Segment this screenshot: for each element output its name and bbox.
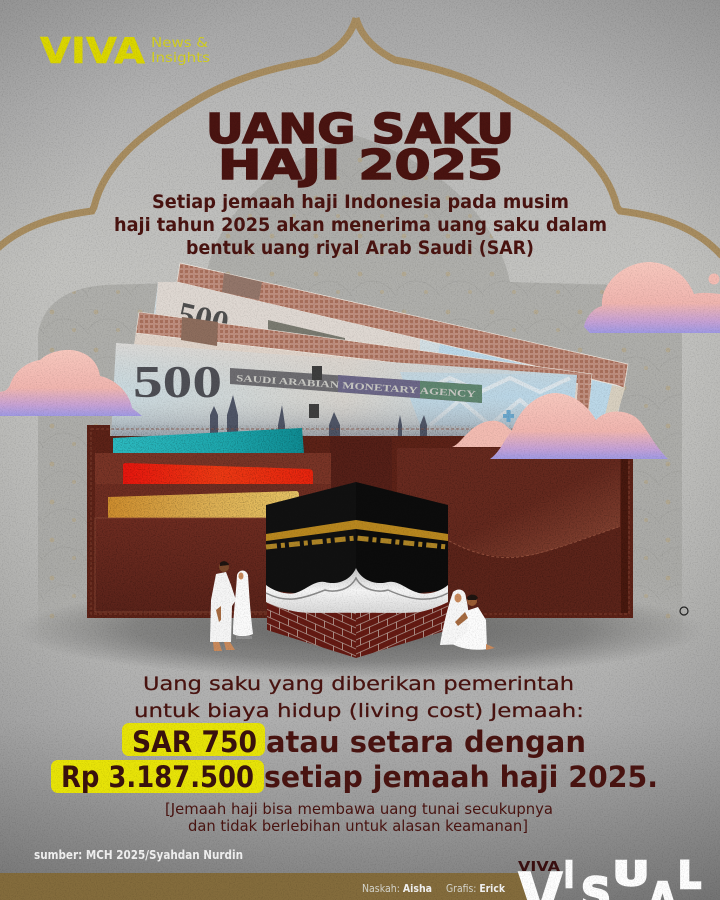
gold band [266,520,448,547]
pilgrims seated [440,590,495,650]
banknotes [111,263,628,440]
woman seated [440,590,469,645]
man standing [210,561,236,651]
VIVA Visual logo: VIVA [518,860,560,875]
VIVA News and Insights logo: Insights [151,51,210,66]
title: UANG SAKU [206,105,514,153]
cloud: left [0,350,142,416]
VIVA News and Insights logo: VIVA [40,31,145,72]
wallet body [87,425,633,618]
brick base [267,598,448,658]
title [206,105,514,189]
woman standing [233,570,253,639]
highlight: Rp 3.187.500: Rp 3.187.500 [61,760,254,794]
kiswah black cloth [266,482,448,600]
Kaaba [266,482,448,658]
cloud: top right [584,262,720,333]
banknote: middle [134,312,592,425]
intro text: untuk biaya hidup (living cost) Jemaah: [134,700,584,722]
upper card pocket [95,453,331,485]
VIVA Visual logo: L [678,854,701,897]
cloud: center right [452,393,668,459]
man seated [452,595,495,650]
lower card pocket [95,518,331,612]
credits [362,883,506,895]
line: atau setara dengan: atau setara dengan [266,725,586,759]
credits: Naskah: Aisha [362,883,432,895]
floor shadow [15,582,705,678]
credits: Grafis: Erick [446,883,506,895]
line: setiap jemaah haji 2025: setiap jemaah haji 2025. [264,760,658,794]
intro text: Uang saku yang diberikan pemerintah [143,673,574,695]
intro text [134,673,584,722]
subtitle [114,191,607,259]
note text [165,800,553,835]
banknote: front: 500 [133,357,222,407]
mosque niche backdrop [0,18,720,650]
wallet grain [87,425,633,618]
middle card pocket [95,484,331,520]
red card [123,463,313,484]
source: sumber: MCH 2025/Syahdan Nurdin [34,848,243,862]
pilgrims standing [210,561,253,651]
VIVA News and Insights logo: News & [151,36,208,51]
gold card [108,491,299,519]
subtitle: Setiap jemaah haji Indonesia pada musim [152,191,569,213]
small ring mark [680,607,688,615]
teal card [113,428,304,454]
bottom gold band [0,873,530,900]
note text: dan tidak berlebihan untuk alasan keamanan] [188,817,528,835]
wallet [87,425,633,618]
banknote: back: 500 [174,296,232,343]
banknote: front [111,343,577,440]
VIVA News and Insights logo [40,31,210,72]
note text: [Jemaah haji bisa membawa uang tunai secukupnya [165,800,553,818]
VIVA Visual logo [518,860,702,900]
gold arch outline [0,18,720,256]
title: HAJI 2025 [218,141,503,189]
right wallet flap [397,448,620,557]
white skirt [266,568,448,613]
subtitle: haji tahun 2025 akan menerima uang saku dalam [114,214,607,236]
highlight: SAR 750: SAR 750 [132,725,257,759]
wallet spine [330,437,392,617]
VIVA Visual logo: I [564,855,574,896]
banknote: front: SAUDI ARABIAN MONETARY AGENCY [236,374,476,400]
VIVA Visual logo: U [613,854,649,893]
subtitle: bentuk uang riyal Arab Saudi (SAR) [186,237,534,259]
banknote: back [150,263,628,430]
